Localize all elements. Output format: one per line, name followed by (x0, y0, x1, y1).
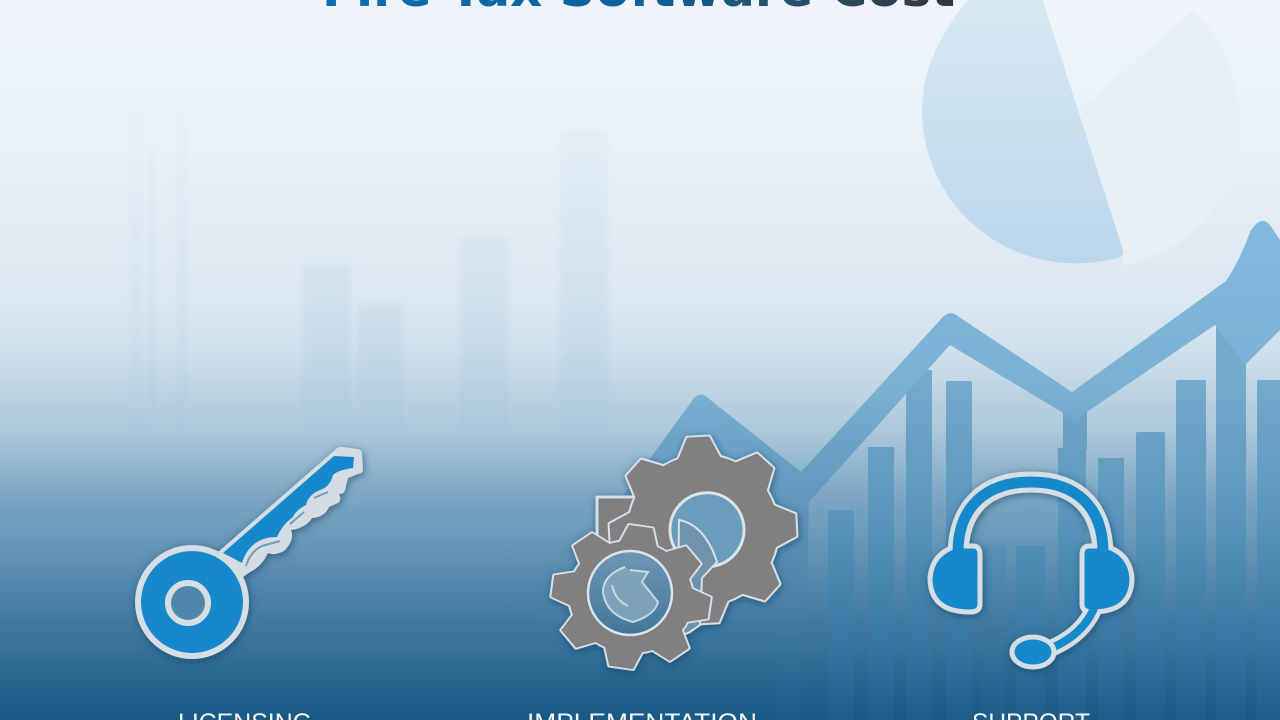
icon: gears (543, 432, 801, 678)
large gear inner crescent (672, 520, 717, 640)
line and bar chart (533, 221, 1280, 720)
microphone (1012, 637, 1054, 667)
key blade outline (218, 447, 363, 590)
headband outline (958, 482, 1103, 556)
right ear cup (1082, 546, 1132, 612)
key hole (168, 583, 208, 623)
trend line with filled first peak (533, 221, 1280, 620)
large gear (605, 432, 801, 628)
icon: headset (930, 482, 1132, 667)
left ear cup (930, 546, 980, 612)
boom blue (1047, 606, 1095, 650)
bars (778, 320, 1280, 720)
small gear (543, 516, 719, 678)
pie: blue slice (922, 0, 1123, 263)
large gear left block (597, 497, 645, 548)
icon: key (138, 447, 363, 656)
faint background bar chart (130, 95, 608, 440)
key teeth highlight (246, 492, 328, 566)
pie chart (922, 0, 1240, 265)
boom outline (1047, 606, 1095, 650)
small gear hub swirl (603, 567, 658, 622)
key head (138, 548, 246, 656)
small gear hub (588, 551, 672, 635)
key blade fill (223, 456, 354, 563)
headband blue (958, 482, 1103, 552)
pie: pale slice (1078, 10, 1240, 265)
